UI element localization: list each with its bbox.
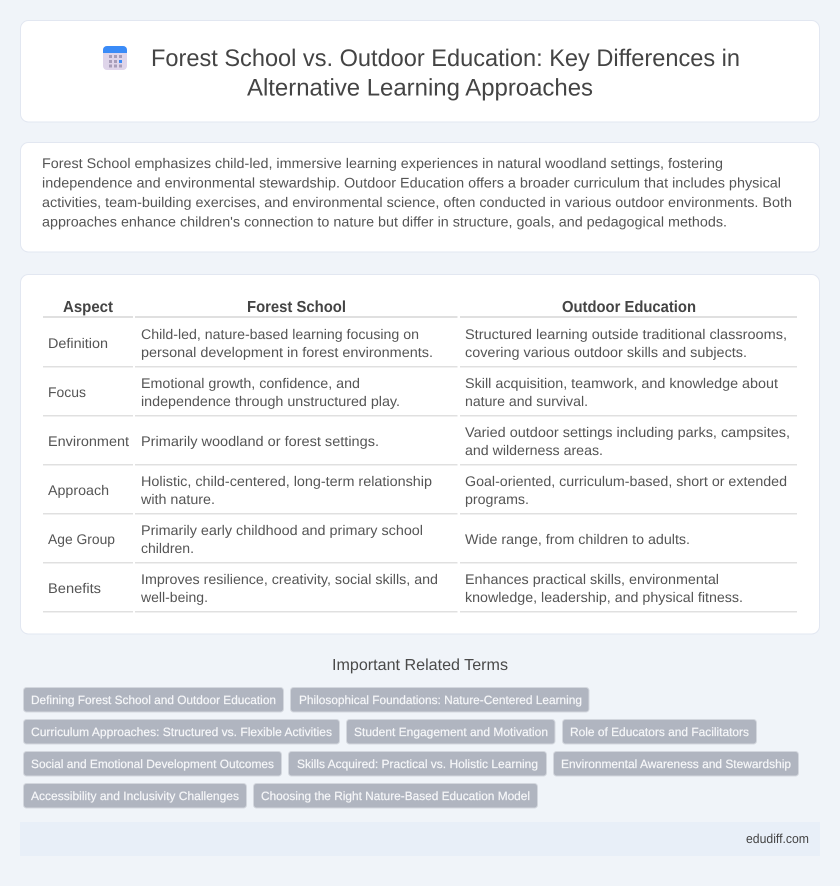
- table row: focus: Focus: [48, 384, 86, 400]
- title: Forest School vs. Outdoor Education: Key Differences in: [151, 45, 740, 72]
- tag: social and emotional: [24, 752, 282, 776]
- table row: focus: [43, 375, 797, 416]
- table row: approach: with nature.: [140, 491, 215, 507]
- table row: approach: Goal-oriented, curriculum-based, short or extended: [465, 473, 787, 489]
- table header row: Outdoor Education: [562, 299, 696, 316]
- tag: accessibility: Accessibility and Inclusivity Challenges: [31, 789, 239, 803]
- panel: comparison table: [20, 274, 820, 634]
- table row: benefits: Improves resilience, creativity, social skills, and: [141, 571, 438, 587]
- table header row: Forest School: [247, 299, 346, 316]
- table row: benefits: Enhances practical skills, environmental: [465, 571, 719, 587]
- tag: philosophical foundations: [290, 688, 589, 712]
- tag: student engagement: Student Engagement and Motivation: [354, 725, 548, 739]
- title: [151, 45, 740, 102]
- tag: choosing model: [254, 784, 538, 808]
- tag: role of educators: [562, 720, 756, 744]
- table row: definition: [43, 326, 797, 368]
- tag: choosing model: Choosing the Right Nature-Based Education Model: [261, 789, 530, 803]
- table row: approach: Holistic, child-centered, long-term relationship: [141, 473, 432, 489]
- table row: age group: Wide range, from children to adults.: [465, 531, 690, 547]
- icon: calendar: [103, 46, 127, 70]
- table row: definition: Structured learning outside traditional classrooms,: [465, 326, 787, 342]
- tag: curriculum approaches: [24, 720, 340, 744]
- table row: environment: Environment: [48, 433, 129, 449]
- table row: benefits: well-being.: [140, 589, 208, 605]
- table row: definition: Child-led, nature-based learning focusing on: [141, 326, 419, 342]
- table header row: Aspect: [63, 299, 114, 316]
- table row: focus: Skill acquisition, teamwork, and knowledge about: [465, 375, 778, 391]
- related terms tags: [24, 688, 798, 808]
- table row: age group: [43, 522, 797, 564]
- table row: definition: Definition: [48, 335, 108, 351]
- table row: environment: and wilderness areas.: [465, 442, 603, 458]
- table row: definition: personal development in forest environments.: [141, 344, 433, 360]
- table row: age group: Age Group: [48, 531, 115, 547]
- table row: focus: nature and survival.: [465, 393, 588, 409]
- tag: role of educators: Role of Educators and Facilitators: [570, 725, 749, 739]
- tag: accessibility: [24, 784, 246, 808]
- table row: benefits: [43, 571, 797, 612]
- table row: definition: covering various outdoor skills and subjects.: [465, 344, 747, 360]
- text block: introduction paragraph: activities, team-building exercises, and environmental science, often conducted in various outdoor environments. Both: [42, 194, 792, 210]
- table row: environment: [43, 424, 797, 466]
- table row: age group: children.: [141, 540, 194, 556]
- text block: introduction paragraph: Forest School emphasizes child-led, immersive learning experiences in natural woodland settings, fostering: [42, 155, 723, 171]
- heading: important related terms: Important Related Terms: [332, 657, 508, 674]
- table row: benefits: Benefits: [48, 580, 101, 596]
- table row: environment: Primarily woodland or forest settings.: [141, 433, 379, 449]
- panel: title header: [20, 20, 820, 122]
- table row: age group: Primarily early childhood and primary school: [141, 522, 423, 538]
- tag: skills acquired: [288, 752, 546, 776]
- tag: social and emotional: Social and Emotional Development Outcomes: [31, 757, 274, 771]
- table row: approach: programs.: [465, 491, 529, 507]
- table row: focus: Emotional growth, confidence, and: [141, 375, 360, 391]
- footer: edudiff.com: [746, 831, 809, 846]
- tag: curriculum approaches: Curriculum Approaches: Structured vs. Flexible Activities: [31, 725, 332, 739]
- tag: environmental awareness: [554, 752, 798, 776]
- tag: philosophical foundations: Philosophical Foundations: Nature-Centered Learning: [299, 693, 582, 707]
- table header row: [43, 299, 797, 318]
- text block: introduction paragraph: [42, 155, 792, 230]
- panel: introduction: [20, 142, 820, 252]
- text block: introduction paragraph: independence and environmental stewardship. Outdoor Education offers a broader curriculum that includes physical: [42, 174, 781, 190]
- table row: approach: Approach: [48, 482, 109, 498]
- table row: focus: independence through unstructured play.: [141, 393, 400, 409]
- text block: introduction paragraph: approaches enhance children's connection to nature but differ in structure, goals, and pedagogical methods.: [42, 214, 727, 230]
- tag: defining: [24, 688, 284, 712]
- table row: environment: Varied outdoor settings including parks, campsites,: [465, 424, 790, 440]
- table row: benefits: knowledge, leadership, and physical fitness.: [465, 589, 743, 605]
- tag: environmental awareness: Environmental Awareness and Stewardship: [561, 757, 791, 771]
- title: Alternative Learning Approaches: [247, 74, 593, 102]
- table row: approach: [43, 473, 797, 514]
- tag: skills acquired: Skills Acquired: Practical vs. Holistic Learning: [297, 757, 538, 771]
- footer: [20, 822, 820, 856]
- tag: defining: Defining Forest School and Outdoor Education: [31, 693, 276, 707]
- tag: student engagement: [346, 720, 555, 744]
